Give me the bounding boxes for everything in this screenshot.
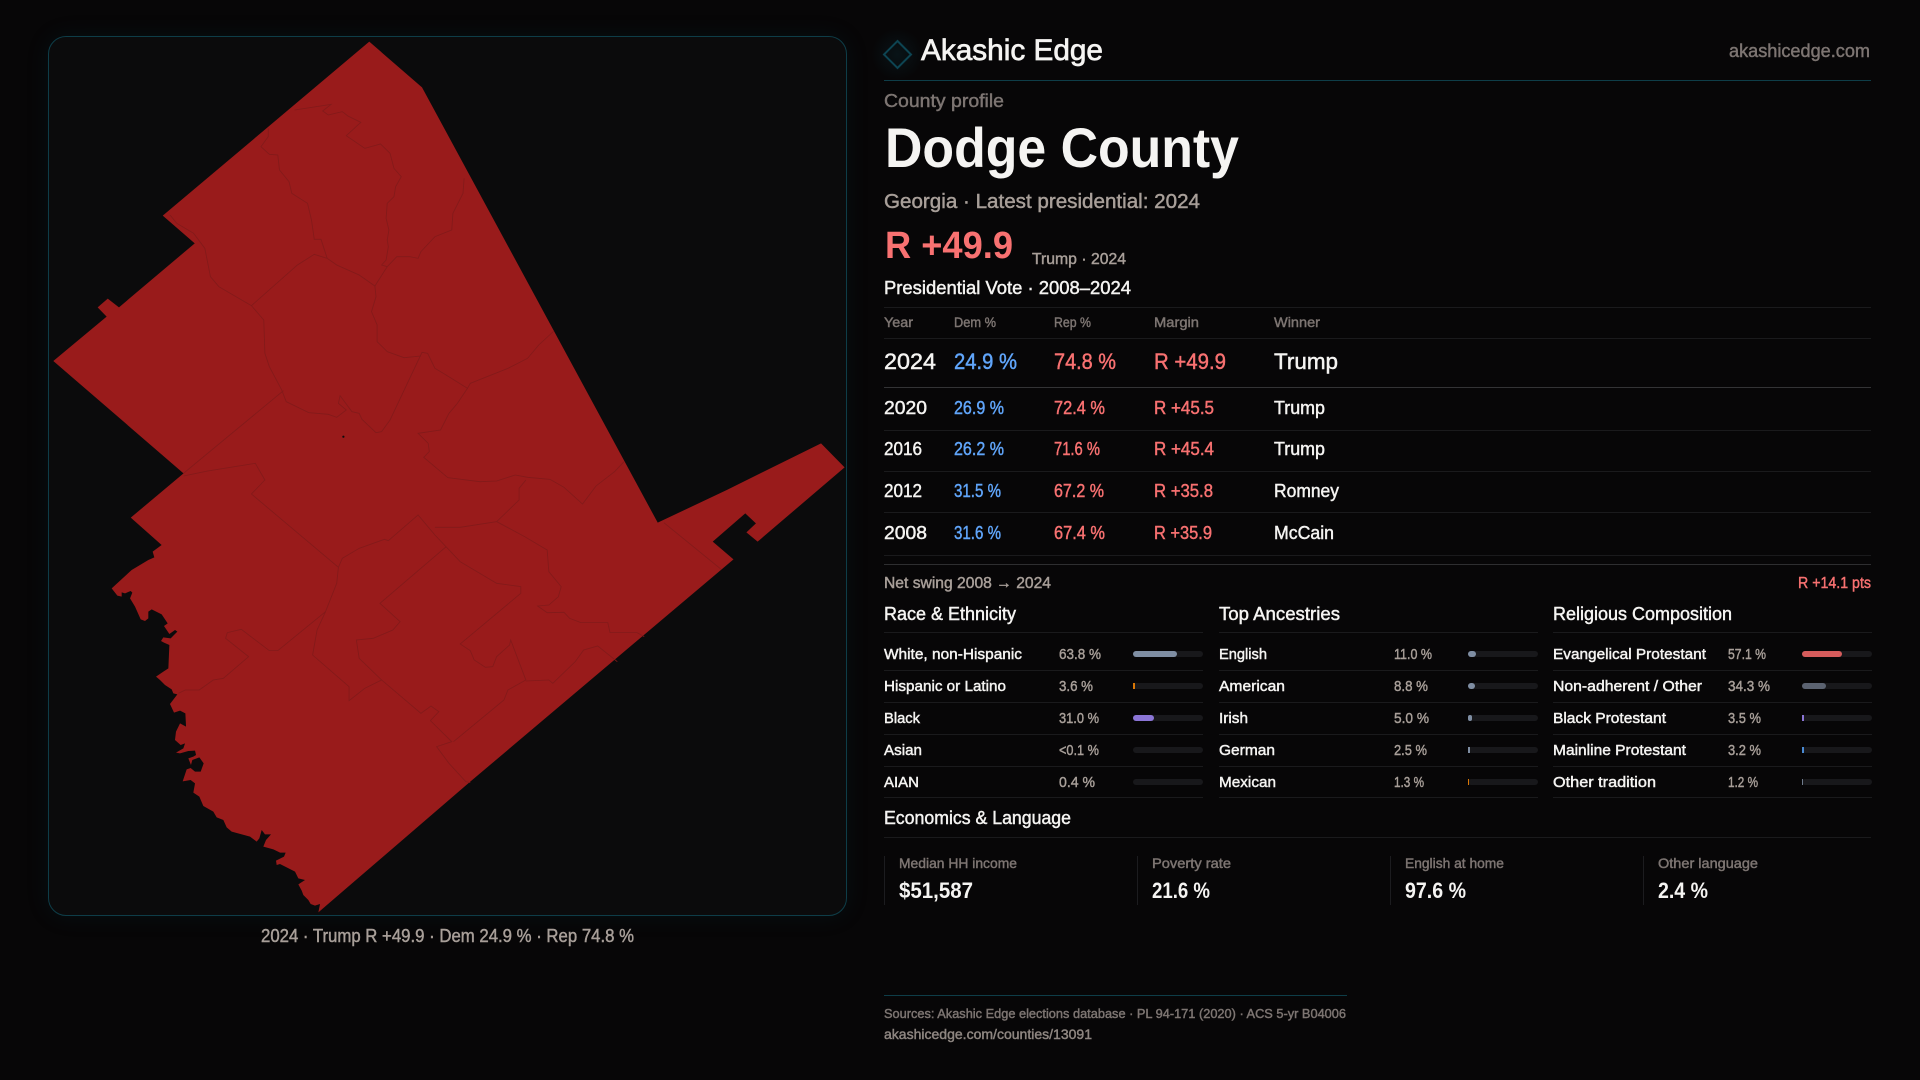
county outline	[53, 42, 845, 912]
row 2008	[884, 523, 1334, 543]
stat: other language: Other language	[1658, 855, 1758, 871]
presidential vote table	[884, 278, 1871, 556]
stat: other language: 2.4 %	[1658, 878, 1708, 903]
site url: akashicedge.com	[1729, 41, 1870, 61]
row 2024: Trump	[1274, 349, 1338, 374]
stat: median household income: $51,587	[899, 878, 973, 903]
row 2012: 31.5 %	[954, 481, 1001, 501]
row: Non-adherent / Other	[1553, 678, 1872, 695]
stat: poverty rate: 21.6 %	[1152, 878, 1210, 903]
heading: Race & Ethnicity	[884, 604, 1016, 624]
heading: Economics & Language	[884, 808, 1071, 828]
row 2012: 67.2 %	[1054, 481, 1104, 501]
row: White, non-Hispanic	[884, 646, 1203, 663]
row: Black Protestant: 3.5 %	[1728, 710, 1761, 727]
net swing: Net swing 2008 → 2024	[884, 575, 1051, 592]
eyebrow: County profile	[884, 91, 1004, 111]
row: Black	[884, 710, 1203, 727]
row 2020: 2020	[884, 398, 927, 418]
footer	[884, 996, 1347, 1042]
table heading: Presidential Vote · 2008–2024	[884, 278, 1131, 298]
county heading	[884, 91, 1239, 268]
row: Black Protestant: Black Protestant	[1553, 710, 1667, 727]
header	[872, 28, 1871, 80]
row: AIAN: AIAN	[884, 774, 919, 791]
stat: English at home: 97.6 %	[1405, 878, 1466, 903]
row: American	[1219, 678, 1538, 695]
row 2012: R +35.8	[1154, 481, 1213, 501]
row 2008: 2008	[884, 523, 927, 543]
map: Dodge County precincts	[53, 42, 845, 912]
column headers: Rep %	[1054, 314, 1091, 330]
stat: other language	[1644, 855, 1758, 905]
stat: median household income: Median HH income	[899, 855, 1017, 871]
heading: Top Ancestries	[1219, 604, 1340, 624]
row 2016: Trump	[1274, 439, 1325, 459]
net swing: R +14.1 pts	[1798, 575, 1871, 592]
column headers: Year	[884, 314, 913, 330]
row: Asian: <0.1 %	[1059, 742, 1099, 759]
stat: median household income	[884, 855, 1017, 905]
row: Mexican: 1.3 %	[1394, 774, 1424, 791]
row: Other tradition	[1553, 774, 1872, 791]
row: Irish	[1219, 710, 1538, 727]
row: Black: Black	[884, 710, 920, 727]
row: Other tradition: 1.2 %	[1728, 774, 1758, 791]
stat: English at home	[1390, 855, 1504, 905]
row 2020: R +45.5	[1154, 398, 1214, 418]
row: Non-adherent / Other: 34.3 %	[1728, 678, 1770, 695]
row: Asian	[884, 742, 1203, 759]
row: Mainline Protestant: 3.2 %	[1728, 742, 1761, 759]
row: German	[1219, 742, 1538, 759]
row: Mainline Protestant	[1553, 742, 1872, 759]
row 2024: 24.9 %	[954, 349, 1017, 374]
row 2024: 74.8 %	[1054, 349, 1116, 374]
row 2016: 71.6 %	[1054, 439, 1100, 459]
subtitle: Georgia · Latest presidential: 2024	[884, 191, 1200, 213]
row: Irish: Irish	[1219, 710, 1248, 727]
row: English: English	[1219, 646, 1267, 663]
heading: Religious Composition	[1553, 604, 1732, 624]
panel: religious composition	[1553, 604, 1872, 798]
row: Evangelical Protestant: 57.1 %	[1728, 646, 1766, 663]
row 2008: R +35.9	[1154, 523, 1212, 543]
panel: top ancestries	[1219, 604, 1538, 798]
row 2008: McCain	[1274, 523, 1334, 543]
precinct boundaries	[170, 104, 721, 783]
row 2024	[884, 349, 1338, 374]
row 2024: 2024	[884, 349, 936, 374]
title: Dodge County	[885, 116, 1239, 179]
row 2016: 26.2 %	[954, 439, 1004, 459]
stat: poverty rate: Poverty rate	[1152, 855, 1231, 871]
row: English: 11.0 %	[1394, 646, 1432, 663]
row: Mainline Protestant: Mainline Protestant	[1553, 742, 1687, 759]
column headers	[884, 314, 1320, 330]
brand name: Akashic Edge	[921, 34, 1103, 67]
map caption: 2024 · Trump R +49.9 · Dem 24.9 % · Rep 74.8 %	[261, 926, 634, 946]
panel: race and ethnicity	[884, 604, 1203, 798]
enclave dot	[342, 436, 344, 438]
row 2020: Trump	[1274, 398, 1325, 418]
row: English	[1219, 646, 1538, 663]
column headers: Margin	[1154, 314, 1199, 330]
row 2008: 31.6 %	[954, 523, 1001, 543]
net swing	[884, 575, 1871, 592]
row 2008: 67.4 %	[1054, 523, 1105, 543]
row: Other tradition: Other tradition	[1553, 774, 1656, 791]
icon: brand diamond	[872, 28, 924, 80]
column headers: Winner	[1274, 314, 1320, 330]
row 2012	[884, 481, 1339, 501]
row 2012: Romney	[1274, 481, 1339, 501]
row: Mexican: Mexican	[1219, 774, 1276, 791]
row: American: American	[1219, 678, 1285, 695]
row: Hispanic or Latino: Hispanic or Latino	[884, 678, 1006, 695]
row 2012: 2012	[884, 481, 922, 501]
row: German: German	[1219, 742, 1275, 759]
row 2020: 72.4 %	[1054, 398, 1105, 418]
row: American: 8.8 %	[1394, 678, 1428, 695]
row 2024: R +49.9	[1154, 349, 1226, 374]
row: Black: 31.0 %	[1059, 710, 1099, 727]
row: Black Protestant	[1553, 710, 1872, 727]
sources: Sources: Akashic Edge elections database · PL 94-171 (2020) · ACS 5-yr B04006	[884, 1006, 1346, 1021]
row: German: 2.5 %	[1394, 742, 1427, 759]
panel: county map	[48, 36, 847, 916]
row: Irish: 5.0 %	[1394, 710, 1429, 727]
row: Evangelical Protestant: Evangelical Protestant	[1553, 646, 1707, 663]
row 2016: 2016	[884, 439, 922, 459]
row 2020: 26.9 %	[954, 398, 1004, 418]
row: AIAN	[884, 774, 1203, 791]
row 2020	[884, 398, 1325, 418]
row 2016: R +45.4	[1154, 439, 1214, 459]
row: Evangelical Protestant	[1553, 646, 1872, 663]
row: Mexican	[1219, 774, 1538, 791]
stat: English at home: English at home	[1405, 855, 1504, 871]
row 2016	[884, 439, 1325, 459]
row: Hispanic or Latino	[884, 678, 1203, 695]
column headers: Dem %	[954, 314, 996, 330]
row: Hispanic or Latino: 3.6 %	[1059, 678, 1093, 695]
row: AIAN: 0.4 %	[1059, 774, 1095, 791]
row: Non-adherent / Other: Non-adherent / Other	[1553, 678, 1702, 695]
row: White, non-Hispanic: 63.8 %	[1059, 646, 1101, 663]
row: Asian: Asian	[884, 742, 922, 759]
county url: akashicedge.com/counties/13091	[884, 1026, 1092, 1042]
headline margin: R +49.9	[885, 225, 1013, 267]
row: White, non-Hispanic: White, non-Hispanic	[884, 646, 1023, 663]
headline winner: Trump · 2024	[1032, 251, 1126, 268]
stat: poverty rate	[1138, 855, 1231, 905]
panel: economics and language	[884, 808, 1871, 905]
